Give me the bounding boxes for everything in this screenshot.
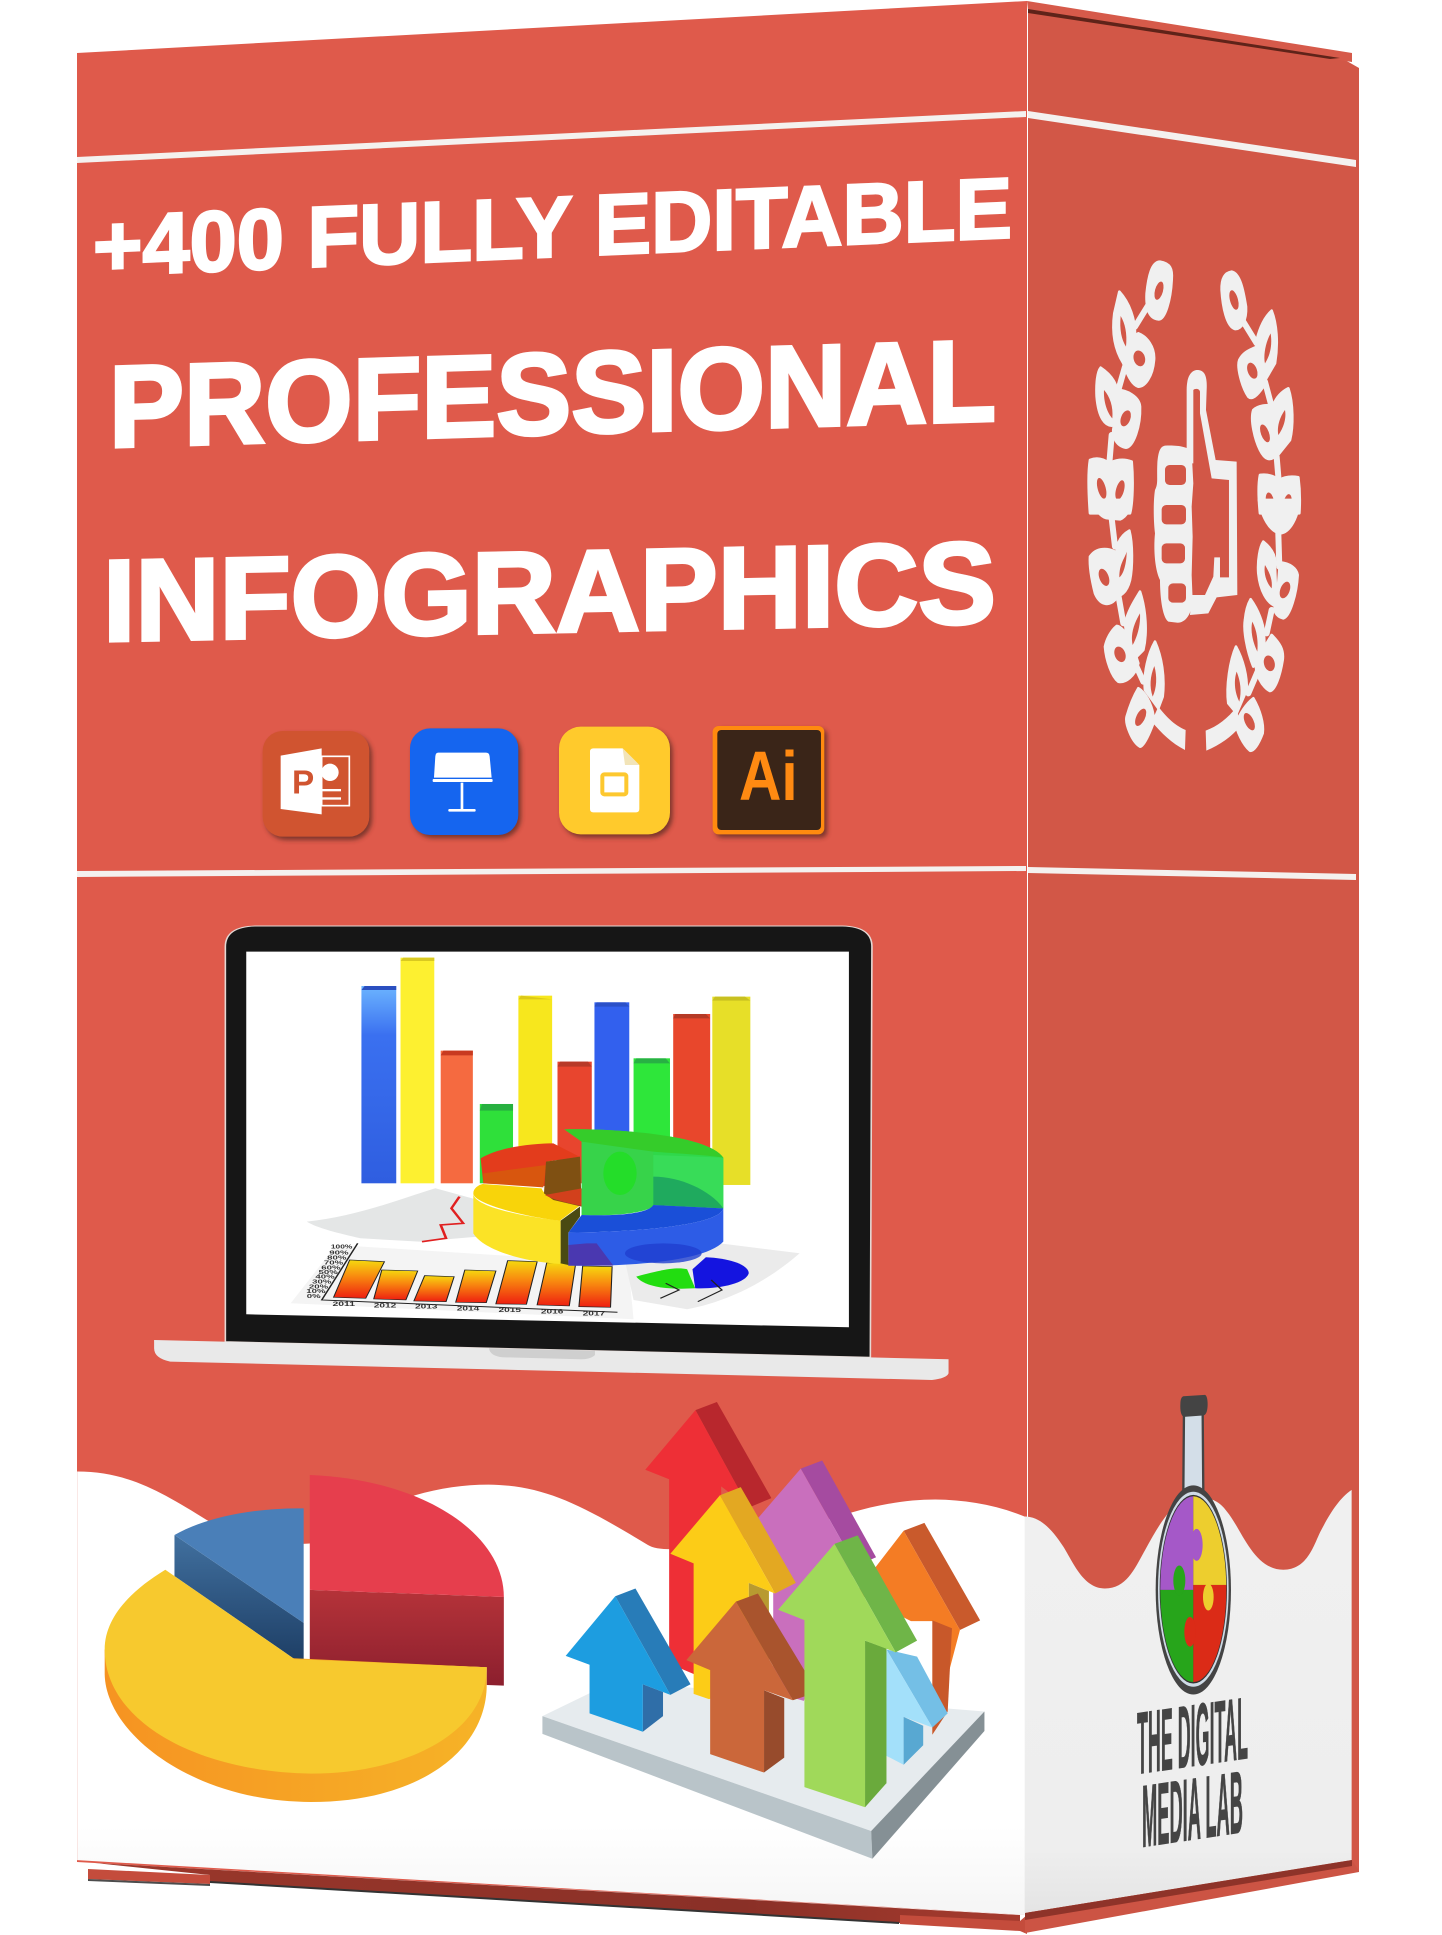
red segment: [481, 1143, 582, 1207]
white band lines on the box: [77, 111, 1356, 880]
bar chart paper: 10%: [306, 1288, 326, 1294]
line chart paper: [307, 1188, 478, 1242]
laptop base: [154, 1340, 949, 1380]
bar chart paper: 2014: [457, 1304, 479, 1312]
bar chart paper: 80%: [327, 1255, 347, 1261]
bottom flaps of the box: [88, 1860, 1359, 1934]
3D pie chart illustration: [105, 1475, 504, 1802]
bar chart paper: 2012: [374, 1301, 396, 1309]
laptop notch: [489, 1348, 595, 1359]
bar chart paper: 2016: [541, 1308, 563, 1315]
blue arrow: [566, 1589, 691, 1732]
lower leaves: [1090, 500, 1299, 751]
icon: google slides and illustrator: Ai: [739, 737, 798, 815]
bar chart paper: 2013: [415, 1303, 438, 1310]
yellow segment: [473, 1184, 580, 1264]
brown arrow: [686, 1593, 807, 1773]
blue slice: [174, 1508, 304, 1660]
laptop with chart screen: [154, 926, 949, 1380]
bar chart paper: 0%: [307, 1293, 322, 1299]
bar chart paper: [291, 1243, 634, 1319]
heading line: infographics: INFOGRAPHICS: [103, 518, 996, 666]
green arrow: [778, 1535, 917, 1807]
pie chart paper: [626, 1243, 800, 1309]
bar chart paper: 2017: [583, 1309, 605, 1317]
bar chart paper: 100%: [331, 1244, 353, 1250]
3D growth arrows illustration: [542, 1402, 984, 1859]
bar chart paper: 90%: [329, 1250, 349, 1256]
left branch upper leaves: [1089, 262, 1300, 513]
logo: flask with puzzle pieces: [1156, 1395, 1231, 1695]
orange arrow: [856, 1523, 980, 1735]
icon: powerpoint and keynote: [263, 728, 521, 840]
yellow arrow: [670, 1487, 796, 1699]
gap between slices: [304, 1544, 310, 1661]
icon: laurel wreath with thumbs up: [1089, 262, 1300, 751]
light blue arrow: [886, 1649, 948, 1765]
box right side face: [1027, 1, 1359, 1925]
bar chart paper: 40%: [315, 1274, 336, 1280]
box front face: [77, 1, 1027, 1915]
heading line: professional: PROFESSIONAL: [109, 315, 996, 472]
yellow slice: [105, 1570, 487, 1802]
laptop screen: [246, 952, 849, 1327]
top flap of side face: [1027, 1, 1352, 62]
bar chart paper: 20%: [309, 1284, 329, 1290]
purple arrow: [758, 1460, 876, 1701]
bar chart paper: 2011: [332, 1300, 355, 1307]
bar chart paper: 70%: [324, 1260, 344, 1266]
bar chart paper: 2015: [499, 1306, 521, 1313]
red slice: [310, 1475, 504, 1686]
green segment: [564, 1129, 723, 1215]
bar chart paper: 30%: [312, 1279, 332, 1285]
dark notch between slices: [561, 1207, 580, 1265]
side white wave panel: [1025, 1490, 1352, 1913]
arrows base platform: [542, 1681, 984, 1859]
heading line: +400 fully editable: +400 FULLY EDITABLE: [93, 160, 1012, 295]
thumb outline: [1187, 370, 1237, 615]
flask cap: [1180, 1395, 1208, 1417]
3D glass pie chart on screen: [473, 1129, 723, 1266]
puzzle pieces: [1158, 1493, 1228, 1686]
blue segment: [568, 1205, 723, 1266]
red arrow: [645, 1402, 771, 1678]
front white wave panel: [77, 1471, 1027, 1915]
bar chart paper: 60%: [321, 1265, 341, 1271]
bar chart paper: 50%: [319, 1269, 339, 1275]
flap shadow: [1028, 9, 1340, 59]
bar chart columns: [361, 958, 750, 1185]
icon: powerpoint and keynote: P: [292, 765, 314, 802]
icon: google slides and illustrator: [559, 726, 827, 838]
thumb fingers: [1154, 446, 1193, 623]
laptop lid: [225, 926, 872, 1357]
flask neck: [1183, 1410, 1203, 1493]
flask bulb: [1156, 1485, 1231, 1695]
